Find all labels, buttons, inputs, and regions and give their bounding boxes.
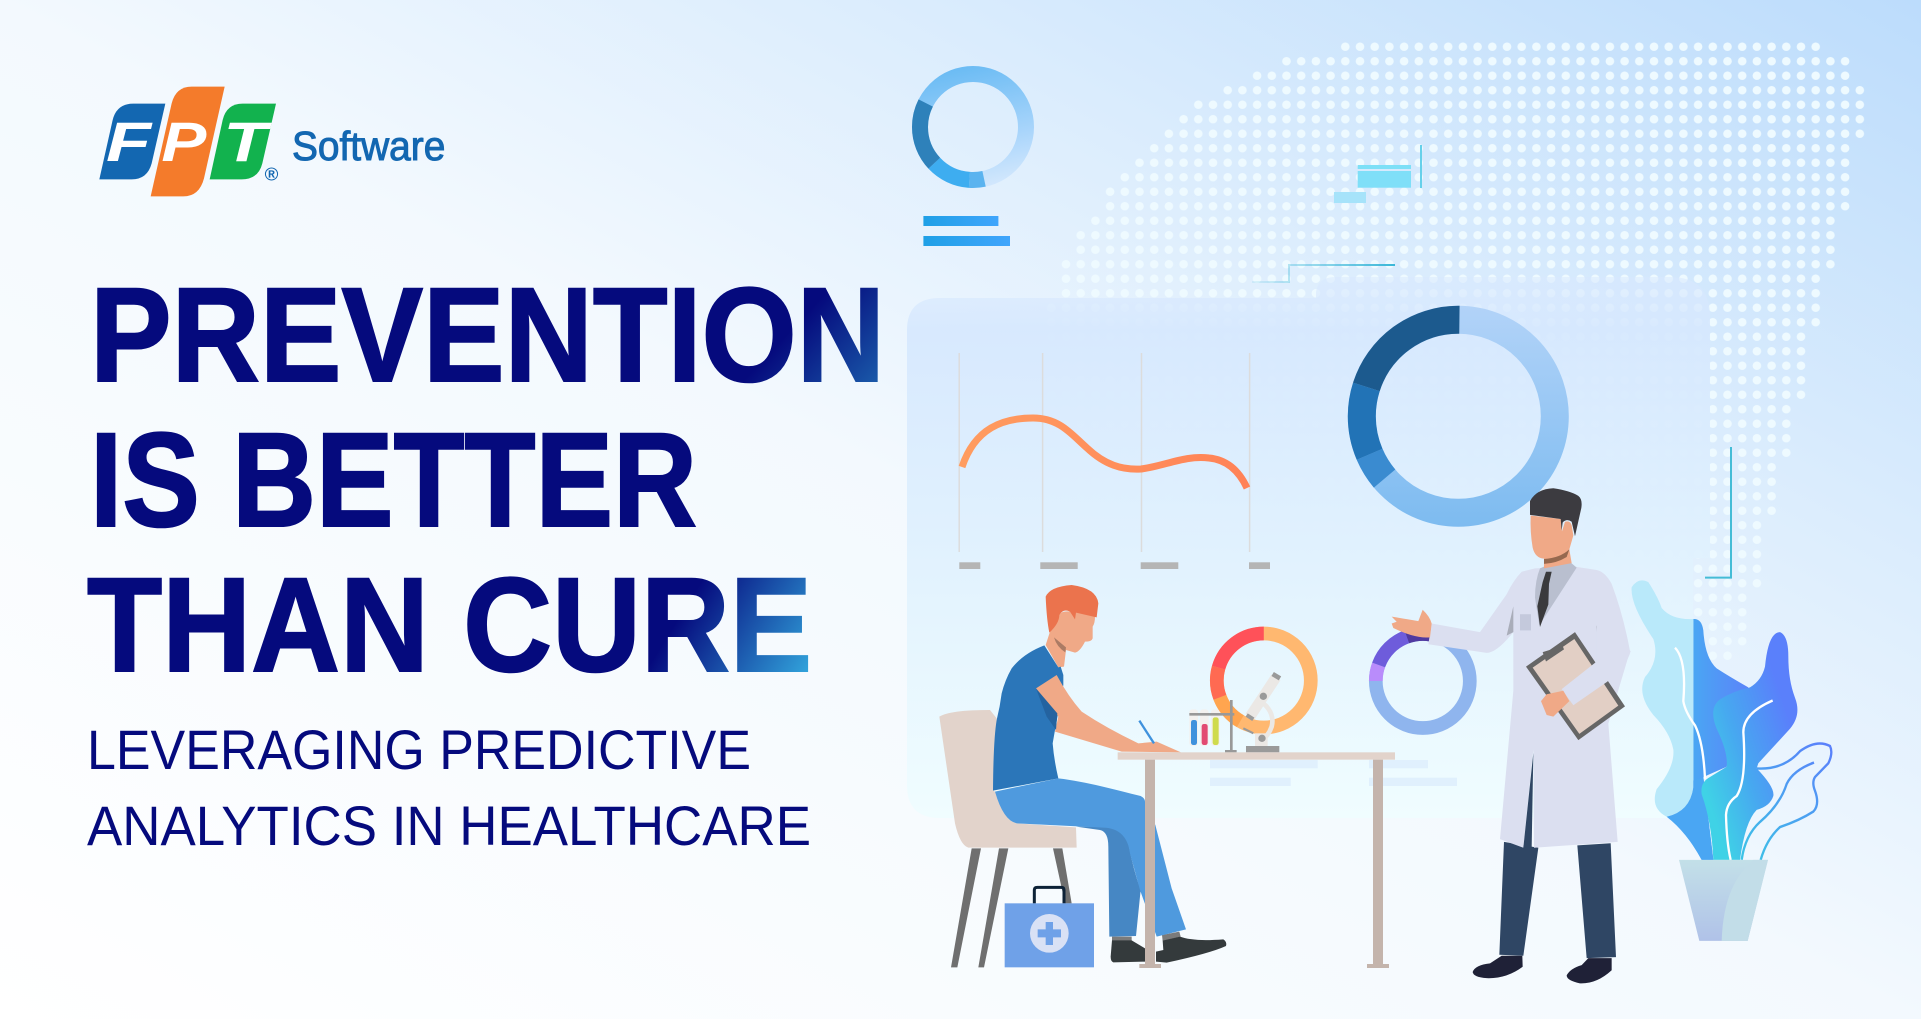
trousers [1499, 842, 1616, 958]
coat slit [1523, 753, 1533, 848]
shoes [1473, 956, 1612, 983]
desk [1118, 752, 1395, 968]
front leaf [1701, 632, 1797, 860]
lab coat [1428, 567, 1630, 848]
hair [1530, 488, 1582, 536]
medical bag [1005, 887, 1094, 967]
chair [939, 710, 1077, 967]
hand [1392, 610, 1432, 638]
registered mark: ® [265, 164, 279, 185]
subtitle line 2: ANALYTICS IN HEALTHCARE [87, 794, 811, 857]
seated man [993, 585, 1226, 963]
logo green tile: T [223, 111, 272, 173]
collar and neck [1535, 562, 1577, 625]
logo orange tile: P [161, 111, 206, 173]
back leaf [1632, 580, 1748, 860]
title line 3: THAN CURE [87, 551, 812, 700]
logo blue tile [99, 104, 165, 179]
test tubes [1189, 700, 1237, 752]
legend bars [923, 216, 1010, 246]
microscope [1243, 674, 1280, 752]
illustration: doctor [1392, 488, 1631, 983]
coat shadows [1507, 606, 1605, 653]
purple donut chart [1376, 634, 1470, 728]
subtitle line 1: LEVERAGING PREDICTIVE [87, 718, 751, 781]
face [1531, 516, 1573, 568]
right bracket line [1705, 447, 1731, 578]
plant pot [1679, 860, 1768, 941]
dotted world map background [1044, 39, 1867, 663]
subtitle [87, 718, 811, 857]
wordmark: Software [292, 123, 445, 169]
thin stems [1742, 743, 1831, 860]
clipboard [1526, 632, 1625, 740]
line chart [959, 353, 1270, 569]
background panel [907, 277, 1710, 818]
front vein [1726, 700, 1773, 860]
white vein [1675, 648, 1705, 779]
logo green tile [210, 104, 276, 179]
illustration: plant [1632, 580, 1831, 941]
tie [1537, 572, 1552, 627]
title line 1: PREVENTION [90, 261, 885, 410]
desk shadows [1210, 760, 1457, 786]
pocket [1520, 614, 1531, 630]
large donut chart [1362, 320, 1555, 513]
logo orange tile [151, 87, 225, 196]
small donut chart [920, 74, 1026, 180]
holding hand [1541, 691, 1569, 717]
logo: FPT Software [99, 87, 445, 196]
chin shadow [1544, 549, 1569, 564]
illustration: seated man, desk, lab equipment [939, 585, 1395, 968]
logo blue tile: F [106, 111, 153, 173]
title [87, 261, 885, 700]
connector line [1252, 265, 1395, 282]
cyan floating blocks [1334, 145, 1422, 203]
sleeve [1562, 625, 1631, 705]
orange donut chart [1217, 634, 1311, 728]
title line 2: IS BETTER [90, 406, 697, 555]
